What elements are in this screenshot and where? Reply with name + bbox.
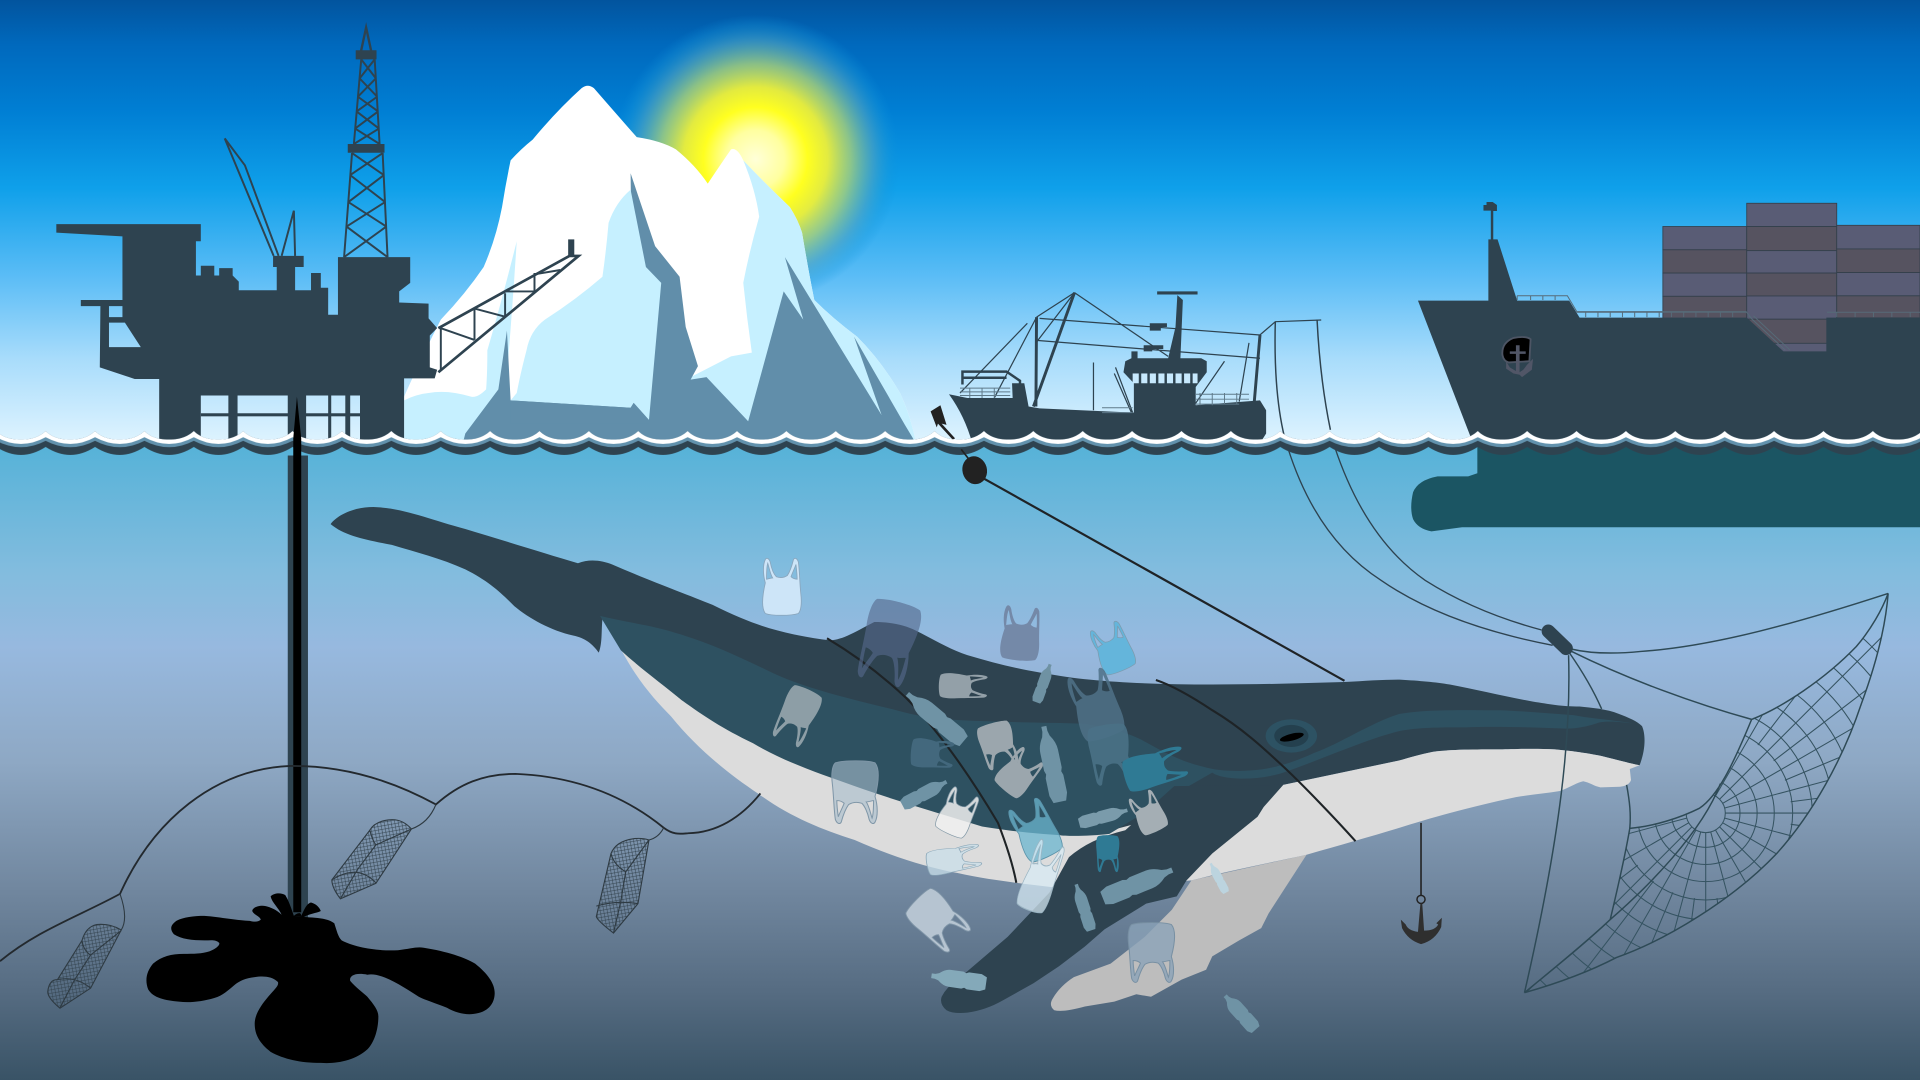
bottle xyxy=(1070,882,1097,932)
bag xyxy=(1128,923,1175,982)
sea background xyxy=(0,443,1920,1080)
bag xyxy=(1064,666,1128,744)
bag xyxy=(999,605,1043,662)
marker flag xyxy=(931,405,955,440)
fishing trawler xyxy=(949,291,1321,443)
waves xyxy=(0,422,1920,462)
bottle xyxy=(899,776,950,811)
container ship xyxy=(1418,202,1920,443)
bag xyxy=(832,761,878,824)
bottle xyxy=(1207,861,1230,895)
deck crane xyxy=(225,138,295,256)
ghost net line with pots xyxy=(0,766,760,961)
bag xyxy=(992,745,1046,801)
trawler bridge windows xyxy=(1133,373,1198,383)
ship anchor in hawse hole xyxy=(1502,337,1533,377)
bag xyxy=(1088,619,1138,677)
hanging anchor xyxy=(1401,823,1442,944)
crab pot 2 xyxy=(332,804,436,899)
bag xyxy=(1120,744,1189,794)
bag xyxy=(933,785,982,841)
bag xyxy=(975,719,1021,772)
whale grey flipper underside xyxy=(1051,855,1307,1011)
whale flipper xyxy=(941,785,1283,1013)
masts and rigging xyxy=(1033,293,1260,407)
bottle xyxy=(1031,662,1055,704)
net outline xyxy=(1524,593,1888,993)
ropes entangling whale xyxy=(827,638,1356,883)
gangway truss xyxy=(438,239,579,372)
bag xyxy=(1006,796,1065,865)
net lines to float xyxy=(1524,593,1888,993)
derrick tower xyxy=(344,22,388,257)
trawler hull and superstructure xyxy=(949,295,1266,443)
bottle xyxy=(1077,804,1129,829)
rig cross beam xyxy=(201,413,360,416)
whale eye xyxy=(1266,719,1317,753)
ship railings xyxy=(1517,296,1920,350)
bottle xyxy=(930,967,987,992)
fishing net xyxy=(1524,592,1889,994)
rig deck and legs xyxy=(56,224,437,443)
bag xyxy=(853,595,924,689)
bag xyxy=(925,843,982,877)
oil pipe xyxy=(288,397,308,922)
iceberg xyxy=(404,86,916,443)
oil rig platform xyxy=(56,22,579,443)
sky background xyxy=(0,0,1920,448)
trawler railings xyxy=(960,388,1249,413)
ship hull and funnel xyxy=(1418,202,1920,443)
bag xyxy=(769,682,825,749)
whale white belly xyxy=(621,649,1640,890)
bottle xyxy=(1035,724,1069,804)
oil spill xyxy=(146,893,495,1063)
underwater net cables xyxy=(1288,447,1553,645)
sun xyxy=(611,15,900,304)
whale mid-tone side xyxy=(600,616,1633,836)
bag xyxy=(902,885,973,956)
bottle xyxy=(902,687,969,748)
bag xyxy=(1096,835,1119,872)
whale xyxy=(331,507,1645,1013)
containers xyxy=(1663,203,1920,352)
bag xyxy=(1014,838,1068,916)
bag xyxy=(938,673,988,700)
net float xyxy=(1548,631,1566,648)
bottle xyxy=(1220,991,1261,1034)
whale dark body xyxy=(331,507,1645,845)
net grid xyxy=(1528,637,1881,991)
crab pot 1 xyxy=(48,894,125,1008)
bag xyxy=(1086,722,1135,787)
buoy and rope xyxy=(959,449,1344,681)
bottle xyxy=(1099,861,1176,907)
crab pot 3 xyxy=(596,828,664,933)
bag xyxy=(910,737,955,770)
bow crane xyxy=(962,372,1020,386)
plastic bags and bottles xyxy=(763,558,1261,1034)
net cables from trawler xyxy=(1275,320,1330,437)
radar mast xyxy=(1144,291,1198,351)
bag xyxy=(1127,788,1170,837)
bag xyxy=(763,558,801,615)
ship underwater hull xyxy=(1411,443,1920,531)
